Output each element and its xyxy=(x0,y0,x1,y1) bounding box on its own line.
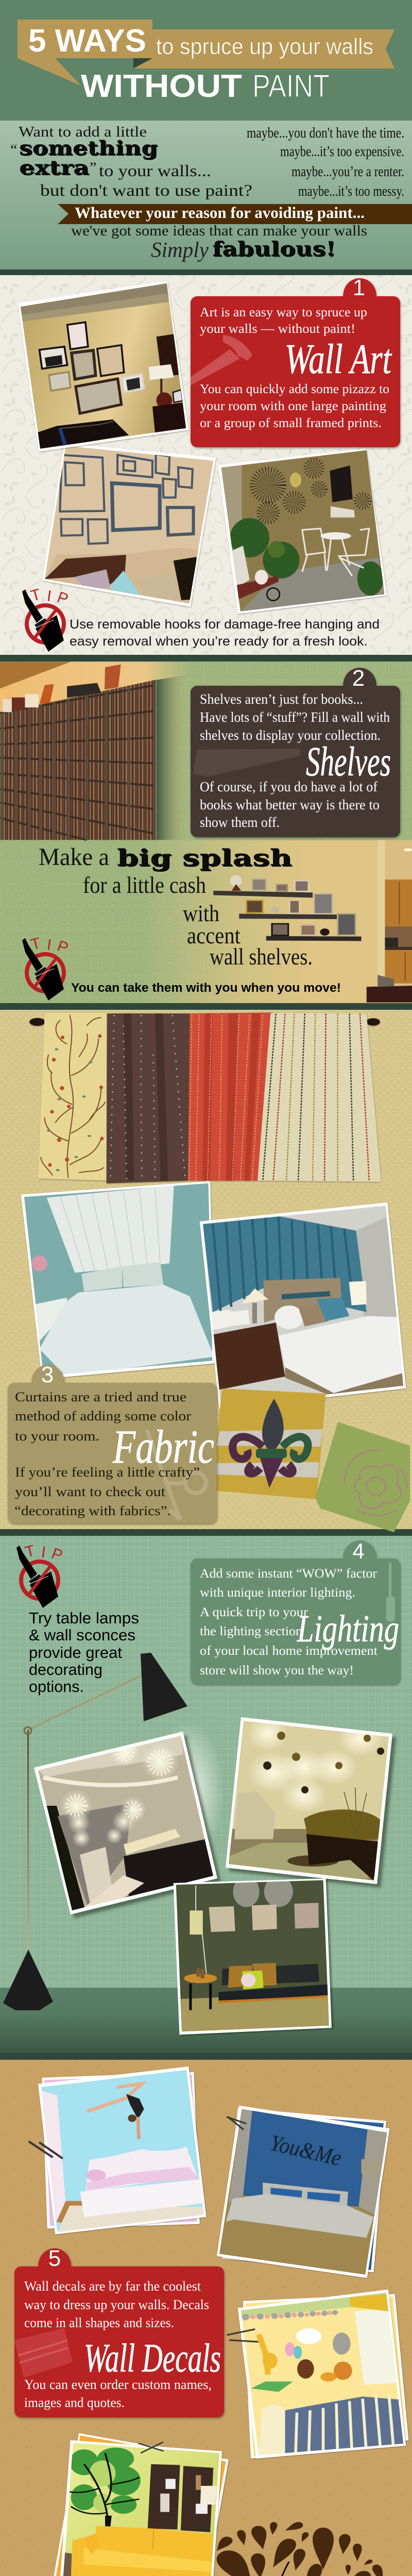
body copy: show them off. xyxy=(200,815,280,830)
panel: accent wall shelves xyxy=(22,840,412,1003)
curtain: red striped xyxy=(188,1012,273,1181)
script heading: Wall Decals xyxy=(84,2335,221,2380)
body copy: A quick trip to your xyxy=(200,1605,308,1619)
lamp glow xyxy=(152,1721,224,1865)
photo: teal curtain wall bedroom xyxy=(200,1201,407,1412)
curtain swatches xyxy=(29,1012,381,1183)
number badge: 3 xyxy=(41,1362,54,1387)
tip: take them with you: P xyxy=(55,938,71,957)
heading xyxy=(39,843,313,970)
tip: take them with you: I xyxy=(46,936,53,954)
heading: wall shelves. xyxy=(210,943,313,970)
section 5: wall decals xyxy=(0,2060,412,2576)
body copy: Shelves aren’t just for books... xyxy=(200,691,363,707)
photo stack: nursery animals xyxy=(228,2289,408,2461)
pillow: green flower xyxy=(315,1422,410,1532)
photo: wall sconces and lounge xyxy=(224,1716,394,1886)
body copy: come in all shapes and sizes. xyxy=(24,2315,174,2330)
body copy: “decorating with fabrics”. xyxy=(14,1503,171,1518)
photo: empty frames on wall xyxy=(40,442,218,607)
tip: table lamps: I xyxy=(40,1544,47,1561)
tip: take them with you: T xyxy=(29,935,43,954)
curtain: brown dotted xyxy=(107,1013,190,1183)
closing line: we've got some ideas that can make your walls xyxy=(71,223,367,239)
body copy xyxy=(200,1567,377,1677)
body copy: to your room. xyxy=(15,1429,99,1444)
intro question: “ xyxy=(10,141,17,158)
body copy xyxy=(24,2279,212,2410)
tip: removable hooks: P xyxy=(55,589,71,608)
body copy: Curtains are a tried and true xyxy=(15,1389,186,1404)
tip: table lamps: provide great xyxy=(29,1643,122,1662)
tip: take them with you xyxy=(22,935,341,1001)
photo: gallery wall with lamp xyxy=(18,280,189,452)
brown banner: Whatever your reason for avoiding paint... xyxy=(75,204,365,222)
ribbon banner xyxy=(18,20,394,86)
body copy: You can even order custom names, xyxy=(24,2377,212,2392)
photo: pendant lamp and sofa xyxy=(174,1876,332,2035)
photo: starburst ceiling lights xyxy=(31,1728,221,1917)
box: shelves text xyxy=(191,666,400,837)
body copy: Wall decals are by far the coolest xyxy=(24,2279,201,2294)
box: wall decals text xyxy=(14,2246,224,2417)
heading: big splash xyxy=(117,845,292,871)
body copy xyxy=(200,306,389,430)
body copy xyxy=(14,1389,200,1518)
curtain: floral cream xyxy=(38,1013,107,1181)
body copy: store will show you the way! xyxy=(200,1664,354,1677)
tip: table lamps: options. xyxy=(29,1677,84,1696)
closing line: fabulous! xyxy=(212,237,336,260)
icon: hammer xyxy=(191,335,252,385)
tip: removable hooks xyxy=(22,586,380,652)
wall shelves with frames xyxy=(213,875,362,941)
photo: bed with white canopy curtain xyxy=(21,1181,215,1380)
icon: screwdriver xyxy=(386,1563,395,1622)
box: lighting text xyxy=(191,1539,400,1684)
body copy: your room with one large painting xyxy=(200,399,387,413)
closing line: Simply xyxy=(151,239,209,262)
number badge: 1 xyxy=(353,275,365,300)
body copy: shelves to display your collection. xyxy=(200,727,381,743)
intro question: ” xyxy=(90,159,96,176)
icon: squeegee xyxy=(14,2328,73,2378)
body copy xyxy=(200,691,390,830)
body copy: method of adding some color xyxy=(15,1409,191,1423)
body copy: You can quickly add some pizazz to xyxy=(200,382,389,396)
intro question xyxy=(10,124,252,199)
body copy: books what better way is there to xyxy=(200,797,380,812)
title xyxy=(28,23,373,104)
pin xyxy=(227,2117,246,2129)
pin xyxy=(139,2443,163,2453)
body copy: images and quotes. xyxy=(24,2395,125,2410)
tip: take them with you: You can take them with you when you move! xyxy=(71,981,341,995)
photo: patio with wall flowers xyxy=(218,447,389,615)
body copy: your walls — without paint! xyxy=(200,322,355,336)
section: intro xyxy=(0,121,412,275)
pillow: fleur de lis xyxy=(212,1388,326,1499)
tip: table lamps: decorating xyxy=(29,1660,102,1679)
intro question: but don't want to use paint? xyxy=(40,181,252,199)
photo group xyxy=(18,280,389,615)
number badge: 2 xyxy=(352,666,365,691)
body copy: with unique interior lighting. xyxy=(200,1586,355,1600)
tip: table lamps xyxy=(16,1542,139,1696)
pin xyxy=(228,2329,258,2342)
body copy: Art is an easy way to spruce up xyxy=(200,306,367,319)
body copy: If you’re feeling a little crafty” xyxy=(15,1465,200,1480)
heading: accent xyxy=(187,922,241,948)
heading: Make a xyxy=(39,843,109,871)
body copy: or a group of small framed prints. xyxy=(200,416,382,430)
curtain: cream wavy stripes xyxy=(258,1013,381,1182)
tip: removable hooks: Use removable hooks for damage-free hanging and xyxy=(70,617,380,632)
intro question: Want to add a little xyxy=(19,124,147,140)
section 3: fabric xyxy=(0,1010,412,1536)
number badge: 5 xyxy=(48,2246,61,2271)
body copy: the lighting section xyxy=(200,1624,303,1638)
body copy: Of course, if you do have a lot of xyxy=(200,779,377,794)
section: header xyxy=(0,0,412,121)
tip: table lamps: & wall sconces xyxy=(29,1626,135,1644)
intro question: extra xyxy=(19,156,89,179)
photo stack: gymnast decal xyxy=(29,2065,209,2235)
decal text: You and Me: You&Me xyxy=(268,2130,344,2171)
box: wall art text xyxy=(191,275,400,447)
tree trunk and branches xyxy=(176,2562,391,2576)
intro question: something xyxy=(19,137,158,159)
body copy: of your local home improvement xyxy=(200,1644,377,1658)
illustration: decal tree xyxy=(166,2521,408,2576)
tip: table lamps: P xyxy=(49,1545,65,1564)
body copy: you’ll want to check out xyxy=(15,1484,166,1499)
closing line xyxy=(71,223,367,262)
icon: scissors xyxy=(147,1430,206,1520)
tip: removable hooks: T xyxy=(29,586,43,605)
box: fabric text xyxy=(8,1362,217,1523)
photo: bookshelf wall xyxy=(0,662,192,840)
tree leaves xyxy=(166,2521,408,2576)
body copy: Add some instant “WOW” factor xyxy=(200,1567,377,1581)
script heading: Fabric xyxy=(112,1420,214,1473)
section 2: shelves xyxy=(0,662,412,1010)
section 1: wall art xyxy=(0,275,412,662)
section 4: lighting xyxy=(0,1536,412,2060)
illustration: floor lamp xyxy=(3,1653,187,2010)
intro question: to your walls... xyxy=(99,161,211,180)
tip: table lamps: Try table lamps xyxy=(29,1609,139,1627)
title: to spruce up your walls xyxy=(156,34,373,59)
tip: table lamps: T xyxy=(23,1542,37,1561)
body copy: Have lots of “stuff”? Fill a wall with xyxy=(200,709,390,725)
title: PAINT xyxy=(252,69,330,104)
tip: removable hooks: easy removal when you’re ready for a fresh look. xyxy=(70,634,368,649)
heading: with xyxy=(183,900,219,926)
number badge: 4 xyxy=(352,1539,365,1563)
list of reasons xyxy=(247,125,404,199)
heading: for a little cash xyxy=(83,872,206,898)
photo stack: You and Me decal xyxy=(215,2105,391,2279)
kitchen scene xyxy=(367,840,412,1003)
icon: saw xyxy=(193,749,300,777)
body copy: way to dress up your walls. Decals xyxy=(24,2297,209,2312)
tip: removable hooks: I xyxy=(46,587,53,605)
title: WITHOUT xyxy=(81,69,242,104)
title: 5 WAYS xyxy=(28,23,146,59)
photo stack: tree decal and yellow sofa xyxy=(53,2433,229,2576)
pin xyxy=(29,2142,62,2158)
